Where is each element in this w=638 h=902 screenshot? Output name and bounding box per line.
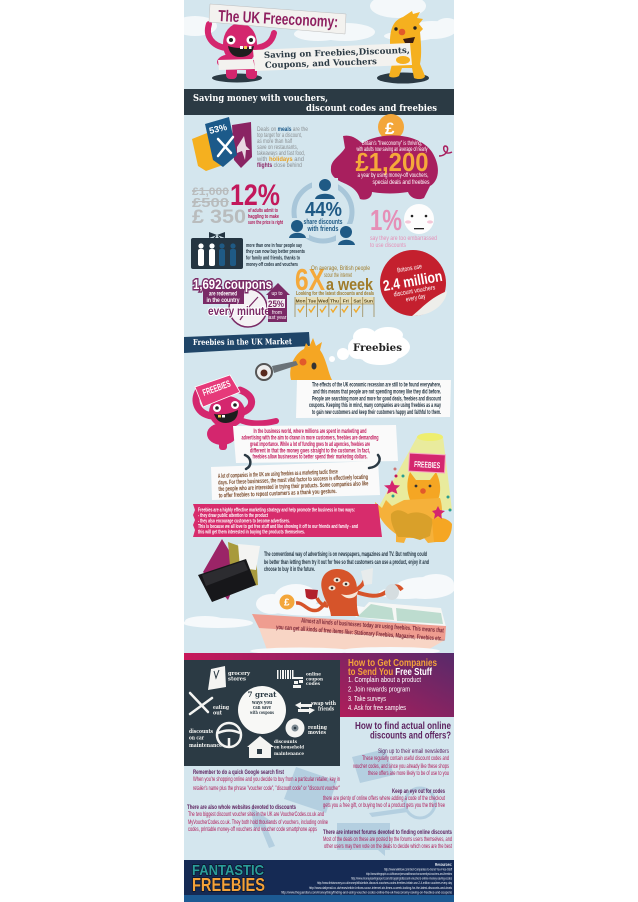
section banner: saving money: Saving money with vouchers,	[193, 94, 328, 104]
panel: 7 great ways	[184, 660, 340, 766]
icon: knife and fork	[190, 693, 212, 714]
header clouds	[173, 0, 459, 41]
text panel: recession: coupons. Keeping this in mind, many companies are using freebies as a way	[309, 403, 441, 409]
arrow: up to 25%	[266, 283, 290, 322]
label: household maintenance: maintenance	[274, 751, 304, 757]
resources: http://www.thisismoney.co.uk/money/bills/article-discount-vouchers-codes-freebies-britain-use-2-4-million-vouchers-every-day	[317, 881, 452, 885]
text panel: business world: great importance. While a lot of funding goes to ad agencies, freebies are	[250, 442, 370, 448]
text panel: marketing tactic: days. For these businesses, the most vital factor to success is effectively locating	[218, 474, 368, 486]
label: renting movies: movies	[308, 730, 326, 736]
label: online coupon codes: codes	[306, 681, 320, 687]
label: online coupon codes: coupon	[306, 676, 323, 682]
watermark icons	[251, 749, 435, 856]
text panel: business world: advertising with the aim to drawn in more customers, freebies are demanding	[242, 436, 379, 442]
hook connectors	[245, 455, 380, 469]
resources: http://www.wikihow.com/Get-Companies-to-Send-You-Free-Stuff	[384, 868, 452, 872]
panel: how to get companies to send free stuff: 1. Complain about a product	[348, 675, 422, 684]
piggy bank text: with adults now saving an average of nearly	[356, 147, 428, 153]
stat: 1,692 coupons per minute	[193, 277, 290, 327]
boat cabin	[355, 602, 446, 627]
arrow: up to 25%: up to	[271, 291, 283, 297]
icon: swap arrows	[295, 702, 315, 714]
calendar: Sat	[353, 298, 361, 304]
redeemed label: in the country	[206, 297, 240, 304]
redeemed label	[203, 289, 244, 304]
stat: 12 percent haggling: of adults admit to	[248, 208, 278, 214]
text: deals on meals: Deals on meals are the	[257, 127, 309, 133]
panel: how to get companies to send free stuff: to Send You Free Stuff	[348, 667, 433, 678]
text: family gifts: more than one in four people say	[246, 243, 302, 249]
boat with octopus	[252, 568, 446, 652]
text: deals on meals: save on restaurants,	[257, 145, 298, 151]
text: deals on meals	[256, 127, 309, 169]
tip: google search: When you're shopping online and you decide to buy from a particular retailer, key in	[193, 777, 340, 783]
struck prices: £500	[192, 195, 229, 210]
stat: 12 percent haggling: haggling to make	[248, 214, 279, 220]
tip: internet forums: other users may then vote on the deals to decide which ones are the best	[324, 844, 452, 850]
icon: people	[287, 178, 358, 245]
label: grocery stores: grocery	[228, 671, 251, 677]
sign: freebies: FREEBIES	[414, 459, 441, 470]
calendar: Sun	[364, 298, 373, 304]
text: family gifts: they can now buy better presents	[246, 249, 305, 255]
text panel: recession: to gain new customers and keep their customers happy and faithful to them.	[312, 410, 441, 416]
text panel: business world: different in that the money goes straight to the customer. In fact,	[250, 448, 370, 454]
stat: 12 percent haggling	[192, 179, 283, 228]
pink ribbon: two ways: this will get them interested in buying the products themselves.	[198, 530, 305, 536]
section banner: saving money: discount codes and freebies	[306, 104, 437, 114]
pink ribbon: two ways	[193, 504, 382, 537]
arrow: up to 25%: last year	[268, 315, 287, 321]
text: deals on meals: flights close behind	[257, 163, 302, 169]
badge: 2.4 million vouchers: Britons use	[397, 263, 423, 275]
label: grocery stores	[228, 671, 251, 682]
icon: discount tags	[192, 117, 252, 171]
text: deals on meals: top target for a discount,	[257, 133, 302, 139]
icon: clock	[229, 289, 267, 327]
tip: eye out for codes: gets you a free gift, or buying two of a product gets you the third free	[323, 803, 445, 809]
text panel: marketing tactic: to offer freebies to repeat customers as a thank you gesture.	[219, 488, 337, 499]
stat: 6X a week with calendar: On average, British people	[311, 265, 370, 272]
label: car maintenance: on car	[189, 736, 204, 742]
subtitle sign	[218, 43, 412, 71]
label: eating out	[213, 705, 229, 716]
label: household maintenance: discounts	[274, 739, 297, 745]
badge: 2.4 million vouchers	[380, 250, 447, 316]
pink ribbon: two ways: Freebies are a highly effective marketing strategy and help promote the business in two ways:	[198, 508, 355, 514]
panel: how to get companies to send free stuff: 3. Take surveys	[348, 694, 386, 703]
text: conventional advertising: choose to buy it in the future.	[264, 566, 315, 573]
pink ribbon: two ways: - they draw public attention to the product	[198, 513, 268, 519]
calendar: Tue	[308, 298, 316, 304]
label: household maintenance	[274, 739, 304, 757]
thought bubble: freebies	[329, 327, 410, 365]
label: car maintenance	[189, 729, 222, 749]
icon: tablet and magazines	[198, 539, 260, 602]
text panel: business world	[233, 425, 398, 463]
badge: 2.4 million vouchers: every day	[405, 293, 427, 303]
text panel: business world: In the business world, where millions are spent in marketing and	[254, 429, 367, 435]
text: deals on meals: with holidays and	[256, 157, 304, 163]
boat text: Almost all kinds of businesses today are using freebies. This means that	[301, 618, 445, 635]
label: car maintenance: discounts	[189, 729, 213, 735]
piggy bank text: Britain's "freeconomy" is thriving,	[362, 141, 422, 147]
text: deals on meals: takeaways and fast food,	[257, 151, 305, 157]
panel: how to get companies to send free stuff	[340, 654, 454, 717]
piggy bank text: a year by using money-off vouchers,	[358, 173, 429, 179]
pink ribbon: two ways: This is because we all love to get free stuff and like showing it off to our friends and family - and	[198, 524, 358, 530]
heading: how to find online discounts	[355, 721, 451, 742]
icon: house	[247, 736, 274, 758]
calendar	[295, 297, 374, 317]
logo: FANTASTIC	[192, 862, 264, 879]
tip: voucher websites: MyVoucherCodes.co.uk. They both hold thousands of vouchers, including online	[188, 820, 328, 826]
tip: email newsletters: These regularly contain useful discount codes and	[362, 756, 449, 762]
clouds behind boat	[183, 574, 455, 628]
badge: 2.4 million vouchers: discount vouchers	[393, 284, 436, 298]
boat text	[276, 618, 445, 643]
logo: FREEBIES	[192, 875, 265, 895]
yellow monster with telescope	[256, 338, 332, 380]
text: conventional advertising: be better than letting them try it out for free so that customers can use a product, enjoy it and	[264, 559, 429, 566]
stat: 44 percent share	[287, 178, 358, 245]
infographic background panel	[184, 0, 454, 902]
label: renting movies	[308, 725, 327, 736]
stat: 6X a week with calendar: scour the internet	[324, 272, 352, 279]
central circle: ways you	[251, 700, 272, 706]
redeemed label: are redeemed	[209, 290, 237, 298]
header illustration	[173, 0, 459, 84]
stat: 1 percent embarrassed: say they are too embarrassed	[370, 235, 437, 242]
resources: Resources:	[435, 862, 452, 867]
footer	[184, 860, 454, 902]
icon: blushing face	[404, 204, 434, 234]
book	[305, 589, 318, 599]
subtitle	[264, 46, 410, 71]
title sign	[209, 4, 346, 34]
tip: internet forums: There are internet forums devoted to finding online discounts	[323, 829, 452, 836]
label: online coupon codes: online	[306, 672, 321, 678]
stat: 12 percent haggling: 12%	[230, 179, 280, 212]
panel: how to get companies to send free stuff: 2. Join rewards program	[348, 684, 410, 694]
stat: 12 percent haggling: sure the price is right	[248, 220, 283, 226]
pink ribbon: two ways: - they also encourage customers to become advertisers.	[198, 518, 290, 524]
icon: shopping bag	[208, 666, 226, 690]
boat text: you can get all kinds of free items like: Stationary Freebies, Magazine, Freebies etc...	[276, 624, 445, 643]
stat: 44 percent share: share discounts	[304, 219, 343, 226]
text panel: business world: freebies allow businesses to better spend their marketing dollars.	[252, 454, 368, 460]
text panel: marketing tactic	[211, 461, 380, 500]
stat: 6X a week with calendar	[295, 262, 374, 317]
text: deals on meals: as more than half	[257, 139, 292, 145]
sign: freebies: FREEBIES	[201, 379, 232, 399]
boat hull	[259, 628, 445, 652]
label: eating out: out	[213, 710, 222, 716]
label: household maintenance: on household	[274, 744, 304, 750]
thought bubble: freebies: Freebies	[353, 343, 402, 354]
piggy bank text: special deals and freebies	[372, 179, 430, 186]
central circle: with coupons	[249, 710, 274, 716]
tip: email newsletters: Sign up to their email newsletters	[378, 748, 450, 755]
label: renting movies: renting	[308, 725, 327, 731]
panel: how to get companies to send free stuff: How to Get Companies	[348, 658, 437, 669]
tip: voucher websites: codes, printable money-off vouchers and voucher code smartphone apps	[188, 827, 317, 833]
stat: 44 percent share: 44%	[305, 199, 342, 221]
cloud under boat	[250, 647, 440, 655]
resources: http://www.telegraph.co.uk/finance/personalfinance/consumertips/vouchers-and-freebies	[366, 872, 452, 876]
calendar: Thu	[330, 298, 339, 304]
tip: eye out for codes	[323, 788, 445, 809]
resources: http://www.moneysavingexpert.com/shopping/discount-vouchers-online-money-saving-codes	[351, 876, 452, 880]
tip: voucher websites: There are also whole websites devoted to discounts	[187, 804, 296, 811]
tip: voucher websites	[187, 804, 328, 833]
every minute: every minute	[208, 304, 270, 318]
icon: steering wheel	[217, 723, 241, 747]
text: family gifts: for family and friends, thanks to	[246, 256, 300, 262]
text: conventional advertising	[264, 551, 429, 573]
tip: email newsletters	[353, 748, 450, 777]
subtitle: Coupons, and Vouchers	[265, 57, 377, 71]
tip: internet forums	[323, 829, 452, 850]
piggy bank callout	[331, 114, 452, 200]
icon: family with gift bow	[191, 232, 243, 269]
struck prices: £ 350	[192, 207, 246, 228]
calendar: Mon	[296, 298, 306, 304]
telescope	[256, 361, 298, 380]
resources	[281, 862, 452, 894]
stat: 6X a week with calendar: Looking for the latest discounts and deals	[296, 291, 374, 297]
plate	[385, 584, 399, 600]
stat: 6X a week with calendar: 6X	[295, 262, 325, 297]
pink monster	[208, 23, 274, 82]
section banner: saving money	[184, 89, 454, 115]
tip: eye out for codes: Keep an eye out for codes	[392, 788, 445, 795]
stat: 1 percent embarrassed	[370, 204, 437, 249]
heading: how to find online discounts: discounts and offers?	[370, 730, 451, 742]
coin: £	[284, 598, 290, 608]
monster group	[362, 472, 452, 543]
text panel: recession: The effects of the UK economic recession are still to be found everywhere,	[312, 382, 441, 388]
label: swap with friends	[311, 701, 336, 712]
icon: barcode	[277, 670, 303, 688]
stat: 6X a week with calendar: a week	[326, 275, 373, 294]
tip: email newsletters: voucher codes, and since you already like these shops	[353, 764, 449, 770]
section banner: freebies in the UK market	[184, 332, 310, 353]
label: online coupon codes	[306, 672, 323, 687]
text: family gifts: money-off codes and vouchers	[246, 262, 298, 268]
label: swap with friends: swap with	[311, 701, 336, 707]
coupon count: 1,692 coupons	[193, 277, 272, 292]
text panel: recession: People are searching more and more for good deals, freebies and discount	[312, 396, 441, 402]
tip: eye out for codes: there are plenty of online offers where adding a code of the checkout	[323, 796, 445, 802]
stat: 1 percent embarrassed: 1%	[370, 205, 402, 237]
struck prices	[192, 186, 246, 228]
heading: how to find online discounts: How to find actual online	[355, 721, 451, 732]
yellow monster	[377, 11, 429, 84]
text: family gifts	[246, 243, 305, 268]
text: conventional advertising: The conventional way of advertising is on newspapers, magazines and TV. But nothing could	[264, 551, 427, 558]
label: swap with friends: friends	[318, 706, 334, 712]
tip: voucher websites: The two biggest discount voucher sites in the UK are VoucherCodes.co.uk and	[188, 812, 324, 818]
icon: discount tags: 53%	[208, 122, 228, 136]
text panel: recession: and this means that people are not spending money like they did before.	[313, 390, 441, 396]
label: grocery stores: stores	[228, 676, 246, 682]
label: eating out: eating	[213, 705, 229, 711]
stat: 1 percent embarrassed: to use discounts	[370, 242, 407, 249]
arrow: up to 25%: from	[272, 310, 282, 316]
piggy bank text: £1,200	[356, 147, 428, 177]
top strip	[184, 653, 454, 660]
tip: google search: retailer's name plus the phrase "voucher code", "discount code" or "discount voucher"	[193, 786, 340, 792]
title: The UK Freeconomy:	[218, 8, 339, 31]
cup	[361, 568, 373, 585]
central circle	[238, 686, 286, 734]
struck prices: £1,000	[192, 186, 229, 198]
tip: email newsletters: these offers are more likely to be of use to you	[368, 771, 449, 777]
text panel: marketing tactic: A lot of companies in the UK are using freebies as a marketing tactic these	[218, 468, 338, 480]
octopus	[280, 568, 402, 616]
label: car maintenance: maintenance	[189, 743, 222, 749]
icon: disc	[286, 718, 304, 738]
calendar: Fri	[343, 298, 349, 304]
section banner: freebies in the UK market: Freebies in the UK Market	[193, 336, 292, 347]
resources: http://www.theguardian.com/money/blog/finding-and-using-voucher-codes-online-the-uk-freeconomy-saving-on-freebies-and-coupons	[281, 890, 452, 894]
badge: 2.4 million vouchers: 2.4 million	[382, 268, 444, 295]
pink monster with freebies sign	[195, 375, 276, 450]
text panel: recession	[296, 380, 451, 418]
icon: coin: £	[385, 119, 395, 138]
tip: google search: Remember to do a quick Google search first	[193, 769, 285, 776]
subtitle: Saving on Freebies,Discounts,	[264, 46, 410, 61]
text panel: marketing tactic: the people who are interested in trying their products. Some companies also like	[218, 480, 369, 493]
tip: google search	[193, 769, 340, 792]
logo	[192, 862, 265, 895]
spotlight and yellow monsters	[362, 433, 452, 543]
calendar: Wed	[318, 298, 328, 304]
arrow: up to 25%: 25%	[268, 299, 284, 309]
panel: how to get companies to send free stuff: 4. Ask for free samples	[348, 703, 406, 712]
resources: http://www.dailymail.co.uk/news/article-britons-scour-internet-six-times-a-week-looking-for-the-latest-discounts-and-deals	[309, 886, 452, 890]
tip: internet forums: Most of the deals on these are posted by the forums users themselves, and	[323, 837, 452, 843]
central circle: 7 great	[248, 690, 277, 699]
stat: 44 percent share: with friends	[307, 226, 339, 233]
piggy bank text	[356, 141, 430, 186]
central circle: can save	[253, 705, 271, 711]
